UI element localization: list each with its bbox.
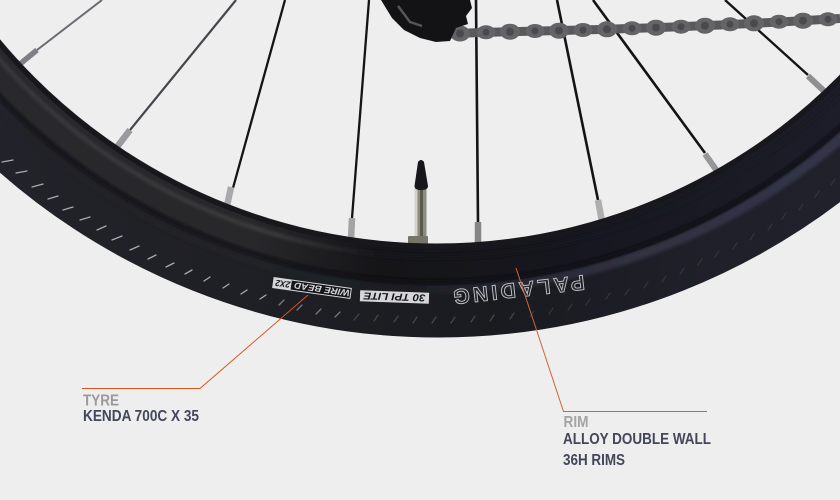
tyre print: 30 TPI label: 30 TPI LITE	[363, 289, 426, 303]
label: tyre heading: TYRE	[83, 392, 119, 410]
chain	[448, 12, 840, 42]
tyre print: 30 TPI label	[360, 289, 429, 304]
tyre print: wire bead label: WIRE BEAD	[293, 280, 350, 298]
callout: tyre	[83, 392, 199, 425]
tyre	[0, 0, 840, 309]
tyre print: wire bead label	[273, 277, 351, 298]
leader line: rim	[516, 268, 707, 412]
tyre print: brand name: PALADING	[452, 270, 586, 308]
label: rim value line 2: 36H RIMS	[563, 452, 625, 469]
callout: rim	[563, 414, 711, 469]
rim	[0, 0, 840, 282]
icon: valve	[408, 160, 428, 244]
tyre print: wire bead label: 2X2	[275, 278, 292, 290]
label: rim heading: RIM	[564, 414, 588, 431]
label: rim value line 1: ALLOY DOUBLE WALL	[563, 431, 711, 448]
tyre tread marks	[2, 160, 835, 323]
leader line: tyre	[82, 295, 308, 388]
spokes	[20, 0, 824, 245]
label: tyre value: KENDA 700C X 35	[83, 408, 199, 425]
hub cassette	[381, 0, 472, 42]
